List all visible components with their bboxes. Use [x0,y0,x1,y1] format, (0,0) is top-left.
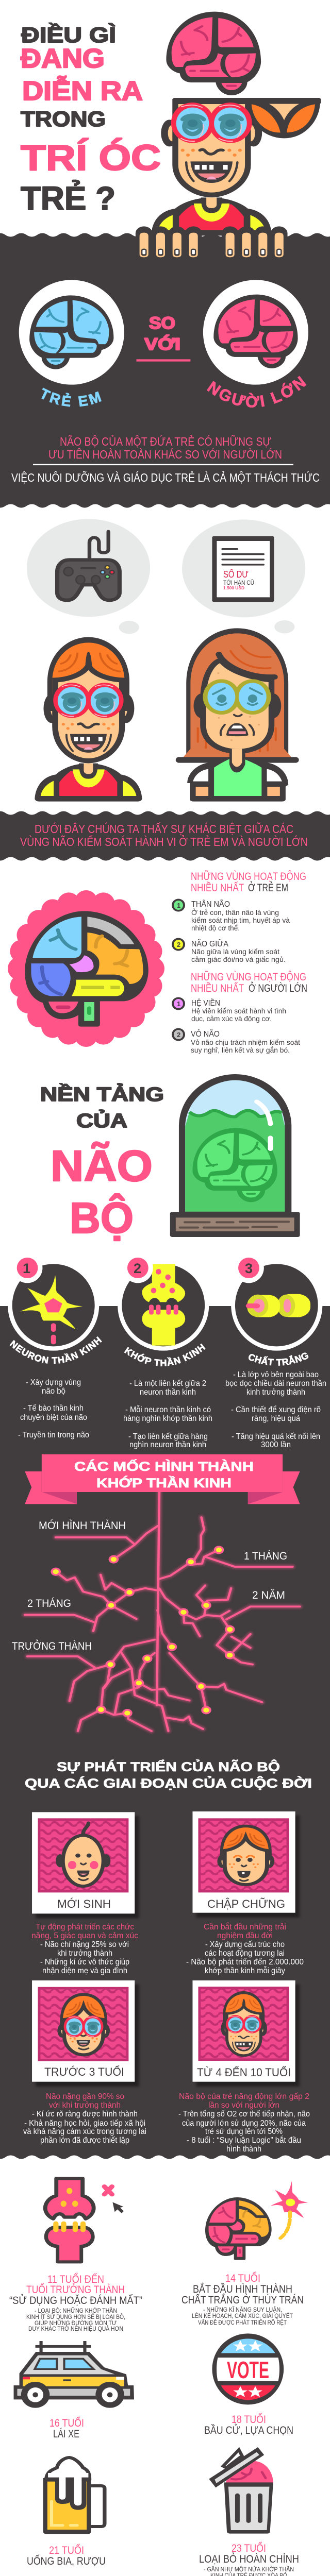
panel: child versus adult brain [19,280,308,408]
text block: newborn: khi trưởng thành [57,1949,112,1958]
tree labels [12,1520,287,1652]
woman torso [187,749,288,802]
face features [171,103,252,183]
text block: neuron facts: chuyên biệt của não [20,1413,87,1422]
badge numbers [23,1261,253,1276]
title [21,23,161,217]
icon: coloured brain [25,911,148,1027]
title: DIỄN RA [22,76,143,106]
bill text [223,569,254,590]
panel: most active regions in adults: suy nghĩ, liên kết và sự gắn bó. [191,1046,290,1054]
caption: 16 years: LÁI XE [53,2428,79,2440]
label: so voi: VỚI [144,335,180,353]
text block: age 4 to 10: - Trên tổng số O2 cơ thể tiếp nhận, não [178,2109,310,2119]
text block: age 4 to 10: trẻ sử dụng lên tới 50% [205,2127,283,2136]
caption: 21 years [27,2544,106,2567]
text block: before 3: Não nặng gần 90% so [46,2092,124,2101]
caption: 18 years: BẦU CỬ, LỰA CHỌN [204,2424,293,2436]
panel: dark band intro [0,233,330,508]
tree labels: 2 THÁNG [27,1598,71,1609]
caption: 23 years: LOẠI BỎ HOÀN CHỈNH [199,2553,299,2565]
text block: 11 years to adulthood [9,2273,142,2332]
arc labels: KHỚP THẦN KINH [124,1344,205,1366]
label: nguoi lon: NGƯỜI LỚN [207,376,306,408]
heading: foundations of the brain: NÃO [51,1142,153,1190]
panel: most active regions in children: nhiệt độ cơ thể. [191,924,240,932]
text block: white matter facts: ràng, hiệu quả [252,1414,300,1423]
text block: synapse facts: - Tạo liên kết giữa hàng [128,1432,208,1441]
panel: most active regions in adults: VỎ NÃO [191,1028,220,1039]
panel: child and adult thoughts [27,519,305,802]
thought bubble: credit bill [182,519,305,633]
panel: building blocks circles [8,1253,322,1351]
caption: 18 years [204,2413,293,2436]
panel: before 3 polaroid: TRƯỚC 3 TUỔI [44,2065,124,2078]
caption: 23 years [199,2542,299,2576]
caption: 21 years: 21 TUỔI [49,2544,84,2556]
label: so voi [144,314,180,353]
icon: brain with neuron [205,2181,308,2260]
text block: neuron facts [18,1378,89,1439]
text block: toddler: khớp thần kinh mỗi giây [205,1965,285,1975]
icon: brain in trash can [209,2447,273,2534]
panel: most active regions in adults: Vỏ não chịu trách nhiệm kiểm soát [191,1038,300,1046]
icon: beer mug [43,2458,105,2534]
panel: most active regions in adults [172,971,307,1054]
heading: brain development over life stages [25,1759,312,1791]
kid body [152,197,272,235]
text block: 14 years: BẮT ĐẦU HÌNH THÀNH [193,2283,292,2295]
caption: 16 years: 16 TUỔI [50,2417,84,2429]
icon: baby face [56,1823,110,1886]
number badge 1 green [172,899,185,912]
text block: 11 years to adulthood: DUY KHÁC TRỞ NÊN HIỆU QUẢ HƠN [28,2325,123,2332]
badge numbers: 1 [23,1261,30,1276]
panel: brain regions diagram [13,895,159,1042]
badge numbers: 2 [134,1261,141,1276]
text block: age 4 to 10: Não bộ của trẻ năng động lớn gấp 2 [179,2092,309,2101]
panel: most active regions in children: Ở trẻ con, thân não là vùng [191,908,279,917]
icon: older kid face [221,1991,267,2056]
text block: 11 years to adulthood: - LOẠI BỎ: NHỮNG KHỚP THẦN [35,2307,117,2314]
heading: foundations of the brain [40,1083,164,1242]
text block: neuron facts: - Tế bào thần kinh [23,1404,84,1413]
panel: newborn polaroid [32,1812,139,1918]
kid body torso [35,764,142,802]
title: TRẺ ? [21,179,116,217]
icon: brain in a jar [170,1074,300,1237]
illustration: child with open head [152,12,321,235]
tree labels: TRƯỞNG THÀNH [12,1640,92,1652]
panel: most active regions in adults: NHIỀU NHẤT [191,982,244,994]
text block: newborn: năng, 5 giác quan và cảm xúc [31,1931,138,1940]
panel: most active regions in adults: Ở NGƯỜI LỚN [249,982,307,994]
title: ĐIỀU GÌ [21,23,116,47]
panel: most active regions in children: cảm giác đói/no và giấc ngủ. [191,955,286,963]
icon: fingers over the band [136,226,288,257]
text block: age 4 to 10: hình thành [226,2145,261,2154]
text block: before 3: với khi trưởng thành [49,2101,121,2110]
label: so voi: SO [149,314,175,332]
bill text: 1.500 USD [223,586,244,590]
ribbon: synapse formation milestones [25,1454,300,1504]
thought bubble: game controller [27,519,150,634]
text block: before 3: và khả năng cảm xúc trong tương lai [23,2127,146,2136]
caption: 21 years: UỐNG BIA, RƯỢU [27,2555,106,2567]
caption: 18 years: 18 TUỔI [232,2413,266,2426]
number badge 2 grey: 2 [177,1031,180,1039]
text block: brain priorities: NÃO BỘ CỦA MỘT ĐỨA TRẺ CÓ NHỮNG SỰ [60,434,271,448]
heading: foundations of the brain: NỀN TẢNG [40,1083,164,1106]
text block: white matter facts: 3000 lần [261,1440,291,1449]
tree labels: MỚI HÌNH THÀNH [39,1520,126,1532]
pink burst [13,895,159,1042]
icon: pruned synapse [44,2178,124,2263]
text block: age 4 to 10: lần so với người lớn [208,2101,279,2110]
text block: before 3: phần lớn đã được thiết lập [40,2136,129,2145]
number badge 1 purple: 1 [177,1000,180,1008]
text block: synapse facts [123,1379,212,1449]
panel: most active regions in children [172,870,306,963]
text block: synapse facts: - Mỗi neuron thần kinh có [125,1404,211,1414]
text block: 11 years to adulthood: GIÚP NHỮNG ĐƯỜNG MÒN TƯ [35,2319,117,2327]
caption: 23 years: - GẦN NHƯ MỘT NỬA KHỚP THẦN [204,2565,294,2573]
face [175,101,248,195]
text block: toddler: - Não bộ phát triển đến 2.000.000 [186,1957,304,1967]
badge numbers: 3 [245,1261,253,1276]
text block: white matter facts: kinh trưởng thành [246,1388,305,1397]
text block: before 3: - Khả năng học hỏi, giao tiếp xã hội [24,2119,145,2128]
icon: toddler face [217,1825,274,1885]
text block: 14 years [182,2272,304,2326]
text block: neuron facts: - Truyền tin trong não [18,1431,89,1439]
ribbon: synapse formation milestones: KHỚP THẦN KINH [96,1475,232,1490]
text block: white matter facts: - Là lớp vỏ bên ngoài bao [233,1370,319,1379]
icon: vote badge: VOTE [227,2357,269,2383]
panel: most active regions in children: Não giữa là vùng kiểm soát [191,947,279,956]
panel: dark band regions [0,811,330,860]
number badge 1 purple [172,997,185,1010]
text block: synapse facts: nghìn neuron thần kinh [129,1440,206,1449]
panel: toddler polaroid: CHẬP CHỮNG [207,1897,285,1910]
text block: toddler: nghiệm đầu đời [217,1931,273,1940]
woman head [176,628,299,763]
arc labels: NEURON THẦN KINH [9,1336,102,1364]
text block: white matter facts: - Tăng hiệu quả kết nối lên [232,1432,320,1441]
panel: most active regions in children: NÃO GIỮA [191,938,228,948]
circle: neuron [8,1253,99,1351]
panel: age 4 to 10 polaroid [192,1980,300,2087]
text block: synapse facts: hàng nghìn khớp thần kinh [123,1414,212,1423]
text block: newborn: nhận diện mẹ và gia đình [42,1967,127,1975]
bill text: SỐ DƯ [223,569,249,580]
icon: brain above head [166,12,261,95]
icon: adult brain [203,280,308,385]
title: TRÍ ÓC [21,138,161,178]
text block: newborn: - Những kí ức vô thức giúp [40,1958,129,1967]
icon: vote badge [212,2333,284,2404]
text block: regions intro [20,822,308,849]
caption: 16 years [50,2417,84,2440]
icon: three year old face [57,1993,110,2055]
text block: white matter facts [225,1370,326,1449]
panel: toddler polaroid [192,1811,300,1918]
text block: before 3 [23,2092,146,2145]
panel: most active regions in children: THÂN NÃO [191,899,230,909]
text block: newborn: - Não chỉ nặng 25% so với [40,1940,129,1949]
open skull lid [173,98,321,138]
number badge 2 yellow: 2 [177,941,180,948]
number badge 1 green: 1 [177,902,180,909]
panel: dark main section [0,1306,330,2159]
text block: toddler [186,1922,304,1975]
heading: foundations of the brain: BỘ [70,1194,134,1242]
tree labels: 2 NĂM [252,1589,285,1601]
title: TRONG [21,107,106,131]
panel: age 4 to 10 polaroid: TỪ 4 ĐẾN 10 TUỔI [197,2066,291,2079]
ribbon: synapse formation milestones: CÁC MỐC HÌNH THÀNH [74,1459,254,1474]
panel: most active regions in children: kiểm soát nhịp tim, huyết áp và [191,916,290,924]
text block: white matter facts: - Cần thiết để xung điện rõ [231,1405,321,1414]
ears [161,120,262,146]
text block: 11 years to adulthood: TUỔI TRƯỞNG THÀNH [26,2283,125,2296]
panel: most active regions in adults: dục, cảm xúc và động cơ. [191,1014,272,1023]
text block: 11 years to adulthood: KINH ÍT SỬ DỤNG HƠN SẼ BỊ LOẠI BỎ, [26,2313,125,2320]
arc labels [9,1336,308,1366]
chart: neuron synapse tree [25,1492,300,1731]
text block: 14 years: - NHỮNG KĨ NĂNG SUY LUẬN, [203,2306,282,2313]
kid head [43,637,134,761]
panel: most active regions in children: Ở TRẺ EM [248,882,288,894]
text block: brain priorities [11,434,320,484]
text block: age 4 to 10: của người lớn sử dụng 20%, não của [182,2119,306,2128]
text block: before 3: - Kí ức rõ ràng được hình thành [32,2110,138,2119]
number badge 2 grey [172,1028,185,1041]
text block: 11 years to adulthood: 11 TUỔI ĐẾN [47,2273,104,2285]
text block: brain priorities: ƯU TIÊN HOÀN TOÀN KHÁC SO VỚI NGƯỜI LỚN [48,448,282,461]
text block: toddler: Cần bắt đầu những trải [204,1922,286,1931]
caption: 23 years: 23 TUỔI [232,2542,266,2554]
text block: age 4 to 10 [178,2092,310,2154]
panel: before 3 polaroid [32,1980,139,2087]
text block: 14 years: LÊN KẾ HOẠCH, CẢM XÚC, GIẢI QUYẾT [192,2312,293,2319]
icon: child brain [19,280,124,385]
title: ĐANG [21,44,105,74]
heading: foundations of the brain: CỦA [76,1109,127,1132]
text block: toddler: các hoạt động tương lai [205,1949,285,1958]
number badge 2 yellow [172,938,185,951]
text block: synapse facts: neuron thần kinh [140,1388,196,1397]
panel: most active regions in adults: Hệ viền kiểm soát hành vi tình [191,1007,286,1015]
text block: 14 years: VẤN ĐỀ ĐƯỢC PHÁT TRIỂN RÕ RỆT [198,2318,287,2326]
circle: myelin [231,1253,322,1351]
text block: age 4 to 10: - 8 tuổi : “Suy luận Logic” bắt đầu [187,2135,301,2145]
arc labels: CHẤT TRẮNG [249,1352,308,1366]
divider under so voi [136,359,190,362]
tree labels: 1 THÁNG [244,1550,287,1562]
heading: brain development over life stages: SỰ PHÁT TRIỂN CỦA NÃO BỘ [57,1759,280,1774]
icon: car [14,2341,134,2408]
heading: brain development over life stages: QUA CÁC GIAI ĐOẠN CỦA CUỘC ĐỜI [25,1775,312,1791]
text block: 14 years: CHẤT TRẮNG Ở THÙY TRÁN [182,2294,304,2306]
bill text: TỚI HẠN CŨ [223,580,254,586]
panel: newborn polaroid: MỚI SINH [57,1897,111,1910]
panel: most active regions in adults: HỆ VIỀN [191,998,220,1008]
text block: newborn [31,1922,138,1975]
text block: 14 years: 14 TUỔI [225,2272,260,2284]
panel: most active regions in children: NHIỀU NHẤT [191,882,244,894]
text block: synapse facts: - Là một liên kết giữa 2 [129,1379,206,1388]
text block: neuron facts: - Xây dựng vùng [26,1378,81,1387]
text block: 11 years to adulthood: “SỬ DỤNG HOẶC ĐÁNH MẤT” [9,2294,142,2307]
text block: newborn: Tự động phát triển các chức [36,1922,134,1931]
text block: toddler: - Xây dựng cấu trúc cho [205,1940,285,1949]
circle: synapse [118,1253,209,1351]
text block: neuron facts: não bộ [42,1387,65,1396]
label: tre em: TRẺ EM [41,387,102,407]
